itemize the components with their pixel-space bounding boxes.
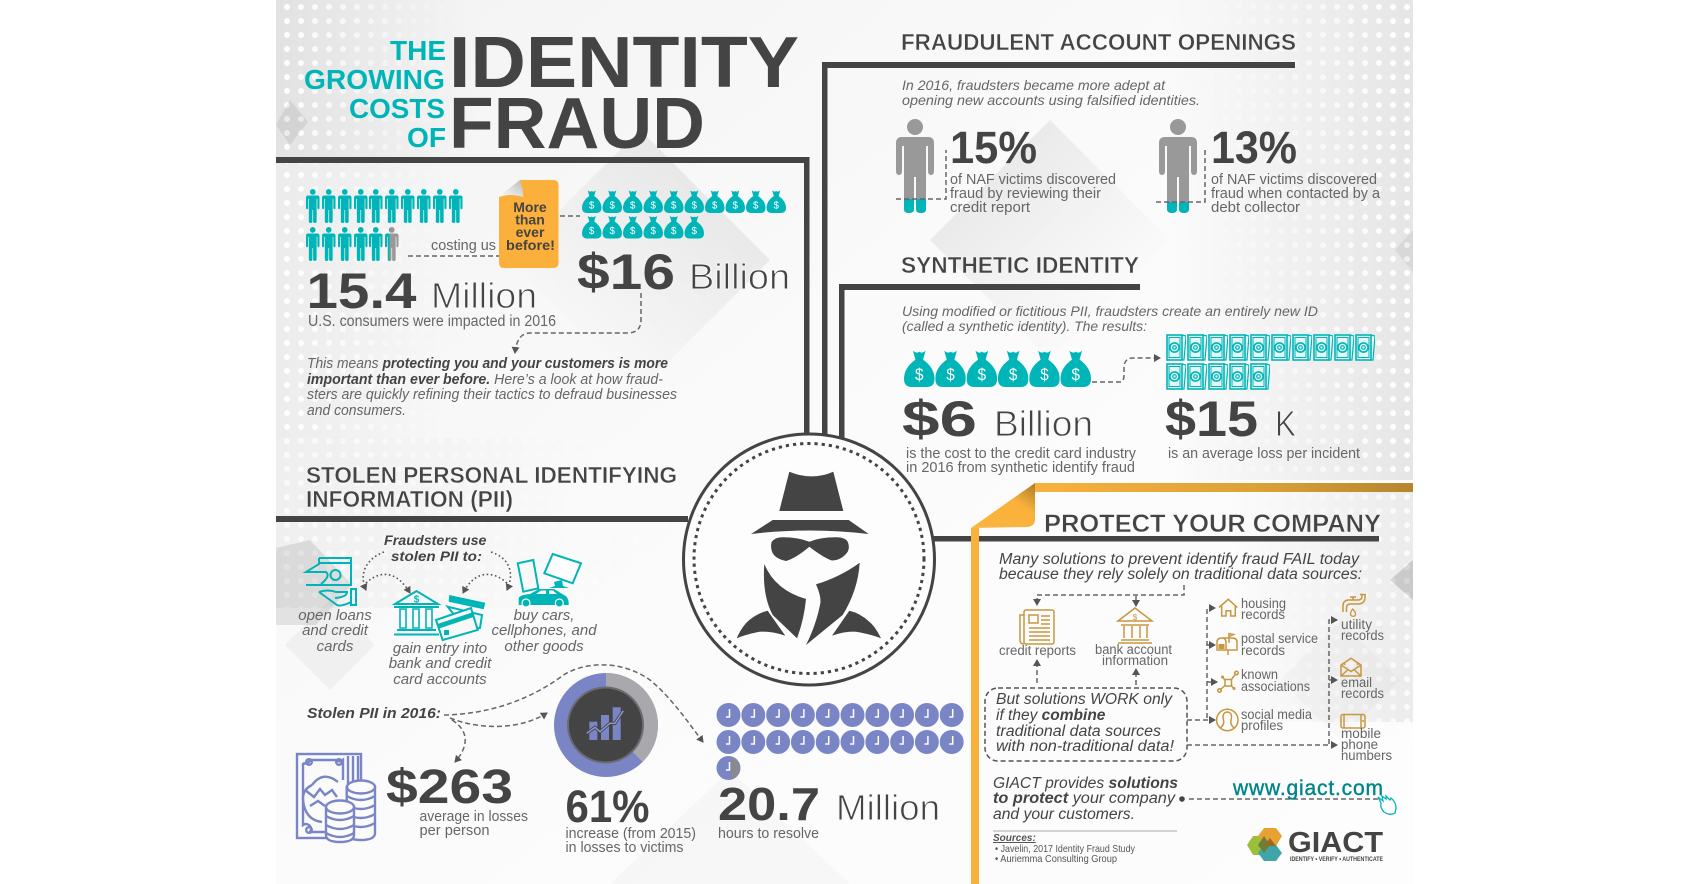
text: GIACT provides solutions: GIACT provides solutions xyxy=(993,775,1178,792)
costing us connector: costing us xyxy=(431,237,496,254)
lead: many solutions fail: Many solutions to prevent identify fraud FAIL today xyxy=(999,551,1360,568)
callout: solutions work only if combined: if they combine xyxy=(996,707,1106,724)
title xyxy=(304,23,799,164)
icons: money bags for 6 billion xyxy=(904,351,1091,387)
intro paragraph: sters are quickly refining their tactics to defraud businesses xyxy=(307,387,677,403)
stat: 15.4 million: Million xyxy=(431,275,537,316)
stat: 15 percent: credit report xyxy=(950,199,1031,216)
stolen PII in 2016 label and arrows xyxy=(307,665,703,762)
source: postal service records: records xyxy=(1241,643,1285,658)
GIACT logo xyxy=(1247,827,1384,863)
label: open loans: open loans xyxy=(298,607,372,624)
stolen PII in 2016 label and arrows: Stolen PII in 2016: xyxy=(307,706,441,722)
source: housing records: records xyxy=(1241,607,1285,622)
note: more than ever before xyxy=(499,180,558,268)
icons: money bags for 16 billion xyxy=(560,190,786,238)
stat: 15 K: $15 xyxy=(1165,391,1258,447)
source: social media profiles: profiles xyxy=(1241,718,1283,733)
source: housing records: housing xyxy=(1241,596,1286,611)
label: bank account information: information xyxy=(1102,653,1168,668)
stat: 15 percent: of NAF victims discovered xyxy=(950,171,1116,188)
stat: 15 K: is an average loss per incident xyxy=(1168,445,1361,462)
stat: 15 K xyxy=(1165,391,1361,462)
source: postal service records: postal service xyxy=(1241,631,1318,646)
stat: 263 average loss xyxy=(386,761,528,839)
stat: 16 billion: Billion xyxy=(689,256,790,297)
label: open loans: and credit xyxy=(302,622,369,639)
intro: fraudulent accounts: In 2016, fraudsters became more adept at xyxy=(902,77,1166,93)
stat: 15 percent: fraud by reviewing their xyxy=(950,185,1101,202)
sources xyxy=(993,831,1177,865)
heading: stolen PII: INFORMATION (PII) xyxy=(306,486,513,512)
label: credit reports: credit reports xyxy=(999,643,1076,658)
stat: 20.7 million hours xyxy=(718,778,940,842)
source: known associations: associations xyxy=(1241,679,1310,694)
intro: fraudulent accounts: opening new accounts using falsified identities. xyxy=(902,92,1200,108)
stat: 263 average loss: average in losses xyxy=(420,809,528,825)
title: GROWING xyxy=(304,64,445,95)
stat: 15.4 million: U.S. consumers were impacted in 2016 xyxy=(308,313,556,330)
text: GIACT provides solutions: and your customers. xyxy=(993,806,1135,823)
arrows: to traditional sources xyxy=(1037,585,1184,685)
costing us connector xyxy=(408,237,499,256)
fraudsters use stolen PII: stolen PII to: xyxy=(391,548,482,564)
source: mobile phone numbers: numbers xyxy=(1341,748,1392,763)
label: gain entry xyxy=(389,640,492,688)
icon: gold bank xyxy=(1118,608,1152,643)
fraudsters use stolen PII xyxy=(363,532,510,593)
title: OF xyxy=(407,122,446,153)
infographic canvas xyxy=(276,0,1413,884)
intro: synthetic identity: (called a synthetic identity). The results: xyxy=(902,318,1147,334)
stat: 13 percent: 13% xyxy=(1211,122,1297,173)
note: more than ever before: than xyxy=(515,212,545,228)
source: utility records xyxy=(1341,594,1384,643)
stat: 13 percent: debt collector xyxy=(1211,199,1300,216)
central badge: fraudster with hat xyxy=(684,434,934,685)
intro: fraudulent accounts xyxy=(902,77,1200,108)
background panel with diamonds and dot patterns xyxy=(276,0,1413,884)
heading: protect your company: PROTECT YOUR COMPANY xyxy=(1044,510,1381,538)
lead: many solutions fail xyxy=(999,551,1362,583)
arrows: to non-traditional sources xyxy=(1187,608,1337,745)
stat: 263 average loss: per person xyxy=(420,823,490,839)
note: more than ever before: before! xyxy=(506,237,555,253)
stat: 13 percent xyxy=(1211,122,1381,216)
icons: people row for 15.4 million xyxy=(306,189,462,261)
text: GIACT provides solutions xyxy=(993,775,1178,823)
source: email records: email xyxy=(1341,675,1372,690)
icon: phone, monitor and car xyxy=(518,554,581,607)
stat: 20.7 million hours: hours to resolve xyxy=(718,826,819,842)
source: social media profiles: social media xyxy=(1241,707,1312,722)
label: buy cars: cellphones, and xyxy=(491,622,597,639)
callout: solutions work only if combined: with non-traditional data! xyxy=(996,738,1175,755)
callout: solutions work only if combined: But solutions WORK only xyxy=(996,691,1173,708)
sources: Sources: xyxy=(993,833,1036,844)
stat: 61 percent: 61% xyxy=(566,781,650,832)
stat: 6 billion: is the cost to the credit card industry xyxy=(906,445,1136,462)
icon: loan cash and hand xyxy=(306,558,356,606)
source: housing records xyxy=(1219,596,1286,622)
arrow: bags to bills xyxy=(1092,358,1160,382)
source: known associations: known xyxy=(1241,667,1278,682)
heading: synthetic identity: SYNTHETIC IDENTITY xyxy=(901,252,1139,278)
donut chart: 61 percent xyxy=(554,673,658,777)
note: more than ever before: More xyxy=(513,199,547,215)
intro paragraph: and consumers. xyxy=(307,403,406,419)
stat: 6 billion: in 2016 from synthetic identify fraud xyxy=(906,459,1135,476)
icon: person with 15 percent feet xyxy=(896,119,946,213)
intro: synthetic identity: Using modified or fictitious PII, fraudsters create an entirely new ID xyxy=(902,303,1318,319)
stat: 263 average loss: $263 xyxy=(386,761,513,814)
source: mobile phone numbers: mobile xyxy=(1341,726,1381,741)
label: bank account information xyxy=(1095,642,1172,668)
icons: clocks for hours xyxy=(716,703,964,780)
heading: stolen PII xyxy=(306,462,677,512)
intro: synthetic identity xyxy=(902,303,1318,334)
text: GIACT provides solutions: to protect your company xyxy=(993,790,1176,807)
label: gain entry: bank and credit xyxy=(389,655,492,672)
icon: teal bank and credit cards xyxy=(394,591,485,640)
title: FRAUD xyxy=(449,84,705,164)
source: known associations xyxy=(1218,667,1310,694)
section divider lines xyxy=(276,62,1379,542)
GIACT logo: IDENTIFY • VERIFY • AUTHENTICATE xyxy=(1290,856,1384,863)
stat: 13 percent: fraud when contacted by a xyxy=(1211,185,1381,202)
icon: gold bank: $ xyxy=(1133,613,1138,622)
stat: 16 billion: $16 xyxy=(577,244,675,300)
source: email records xyxy=(1341,658,1384,701)
source: social media profiles xyxy=(1217,707,1312,733)
icon: person with 13 percent feet xyxy=(1156,119,1205,213)
link: www.giact.com with pointer: www.giact.com xyxy=(1232,777,1383,800)
stat: 6 billion: $6 xyxy=(902,391,977,447)
stat: 20.7 million hours: 20.7 xyxy=(718,778,820,830)
stat: 16 billion xyxy=(577,244,790,300)
source: email records: records xyxy=(1341,686,1384,701)
label: buy cars: other goods xyxy=(504,638,584,655)
source: mobile phone numbers xyxy=(1341,714,1392,763)
source: postal service records xyxy=(1217,631,1318,658)
stat: 61 percent: in losses to victims xyxy=(566,840,684,856)
source: utility records: utility xyxy=(1341,617,1372,632)
GIACT logo: GIACT xyxy=(1288,827,1383,859)
heading: fraudulent account openings: FRAUDULENT ACCOUNT OPENINGS xyxy=(901,29,1296,55)
stat: 13 percent: of NAF victims discovered xyxy=(1211,171,1377,188)
intro paragraph: This means protecting you and your customers is more xyxy=(307,356,668,372)
icons: bills for 15 K xyxy=(1167,335,1375,389)
stat: 15 K: K xyxy=(1275,403,1296,444)
stat: 15.4 million: 15.4 xyxy=(306,263,417,319)
heading: stolen PII: STOLEN PERSONAL IDENTIFYING xyxy=(306,462,677,488)
arrow: billion to intro paragraph xyxy=(515,293,641,353)
stat: 6 billion xyxy=(902,391,1136,476)
label: open loans xyxy=(298,607,372,655)
lead: many solutions fail: because they rely solely on traditional data sources: xyxy=(999,566,1362,583)
label: buy cars xyxy=(491,607,597,655)
icon: credit report document xyxy=(1020,610,1054,644)
label: bank account information: bank account xyxy=(1095,642,1172,657)
stat: 15 percent xyxy=(950,122,1116,216)
stat: 6 billion: Billion xyxy=(994,403,1093,444)
fraudsters use stolen PII: Fraudsters use xyxy=(384,532,487,548)
callout: solutions work only if combined: traditional data sources xyxy=(996,723,1161,740)
title: IDENTITY xyxy=(449,23,799,103)
title: COSTS xyxy=(349,93,445,124)
note: more than ever before: ever xyxy=(516,224,545,240)
link: www.giact.com with pointer xyxy=(1179,777,1396,814)
sources: • Javelin, 2017 Identity Fraud Study xyxy=(995,843,1136,855)
intro paragraph xyxy=(307,356,677,419)
source: mobile phone numbers: phone xyxy=(1341,737,1378,752)
icon: teal bank and credit cards: $ xyxy=(414,594,420,606)
gold corner frame xyxy=(971,483,1413,884)
stat: 61 percent xyxy=(566,781,696,856)
source: utility records: records xyxy=(1341,628,1384,643)
label: gain entry: card accounts xyxy=(393,671,487,688)
label: buy cars: buy cars, xyxy=(514,607,574,624)
label: open loans: cards xyxy=(317,638,354,655)
stat: 20.7 million hours: Million xyxy=(836,787,940,828)
stat: 15 percent: 15% xyxy=(950,122,1037,173)
icon: blue cash and coins xyxy=(297,754,375,842)
stat: 61 percent: increase (from 2015) xyxy=(566,826,696,842)
intro paragraph: important than ever before. Here’s a look at how fraud- xyxy=(307,372,663,388)
title: THE xyxy=(390,35,446,66)
label: gain entry: gain entry into xyxy=(393,640,487,657)
stat: 15.4 million xyxy=(306,263,556,330)
callout: solutions work only if combined xyxy=(985,688,1187,761)
sources: • Auriemma Consulting Group xyxy=(995,853,1117,865)
